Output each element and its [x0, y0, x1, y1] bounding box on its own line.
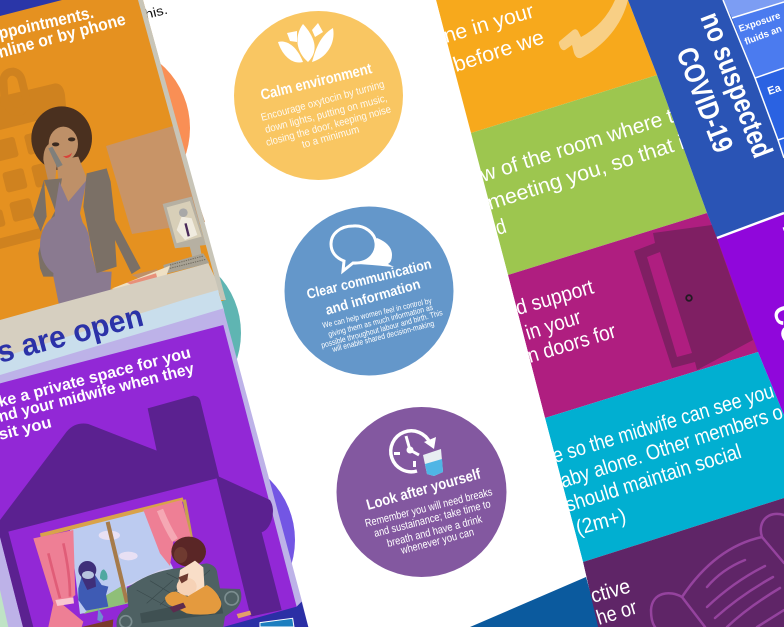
circle: look after yourself: Look after yourself [364, 465, 484, 514]
strip: green room: w of the room where t [477, 105, 676, 187]
table cells: Ea [766, 82, 784, 98]
circle: clear communication [284, 206, 454, 376]
panel: private space page [0, 308, 308, 627]
circle: look after yourself: breath and have a drink [386, 513, 484, 550]
strip: green room [471, 75, 707, 275]
strip: magenta doors: n doors for [525, 320, 619, 368]
icon: speech bubbles [331, 226, 394, 271]
circle: clear communication: We can help women feel in control by [321, 296, 433, 330]
illustration: pregnant woman on phone [31, 106, 161, 310]
icon: clock and glass [391, 431, 443, 476]
circle: look after yourself: whenever you can [399, 526, 475, 557]
panel: purple page [717, 213, 784, 415]
circle: look after yourself: and sustainance; take time to [373, 498, 492, 540]
icon: telephone handset [559, 0, 628, 58]
strip: plum mask: ctive [588, 575, 633, 608]
strip: green room: d [493, 215, 509, 240]
panel: visit page band [0, 290, 225, 385]
circle: look after yourself: Remember you will need breaks [364, 486, 494, 530]
circle: clear communication: possible throughout labour and birth. This [320, 308, 444, 350]
strip: orange phone: before we [450, 26, 547, 77]
page edge: navy footer [223, 602, 308, 627]
illustration: pregnant woman on sofa [116, 537, 251, 627]
text: private space: nd your midwife when they [0, 360, 196, 426]
illustration: calendar [0, 72, 67, 249]
rotated heading: no suspected COVID-19: COVID-19 [669, 43, 739, 157]
panel: appointments page [0, 0, 226, 370]
illustration: house silhouette [0, 396, 282, 627]
circle: calm environment: to a minimum [301, 123, 361, 151]
circle: clear communication: giving them as much information as [327, 303, 434, 339]
circle: calm environment [234, 11, 403, 180]
circle: clear communication: will enable shared decision-making [330, 319, 435, 354]
circle: calm environment: Encourage oxytocin by turning [260, 78, 386, 124]
circle: calm environment: down lights, putting on music, [264, 92, 389, 136]
panel: middle page circles [234, 11, 600, 627]
circle: calm environment: closing the door, keeping noise [265, 103, 392, 149]
strip: plum mask [583, 498, 784, 627]
strip: green room: meeting you, so that i [485, 131, 687, 215]
icon: face mask [651, 514, 784, 627]
strip: magenta doors: in your [523, 306, 584, 345]
table cells: Exposure [737, 10, 782, 35]
panel: COVID-19 blue page [628, 0, 784, 238]
page edge [138, 0, 226, 300]
illustration: computer monitor with doctor [163, 197, 209, 274]
circle: look after yourself [336, 407, 506, 577]
circle: calm environment: Calm environment [259, 60, 374, 104]
strip: cyan distance: should maintain social [563, 440, 744, 517]
strip: orange phone [436, 0, 657, 133]
illustration: window with midwife [40, 497, 193, 614]
strip: orange phone: ne in your [441, 0, 537, 48]
strip: cyan distance: (2m+) [573, 504, 629, 540]
text: private space [0, 345, 196, 444]
circle: clear communication: and information [323, 275, 422, 318]
text: private space: ke a private space for you [0, 345, 193, 411]
circle: clear communication: Clear communication [305, 255, 433, 302]
illustration: desk and papers [0, 263, 222, 362]
icon: lotus [278, 23, 334, 63]
heading: appointments: nline or by phone [0, 10, 128, 62]
illustration: notice board [106, 126, 205, 234]
table cells: fluids an [743, 23, 784, 48]
strip: cyan distance [545, 352, 784, 562]
footer band of middle page [470, 577, 600, 627]
text fragment on white page: his. [143, 2, 169, 22]
panel: coloured advice strips [436, 0, 784, 627]
partially hidden circles behind left page [20, 43, 295, 625]
illustration: midwife and curtain [33, 530, 113, 627]
icon: open door [634, 225, 753, 370]
table cells [723, 0, 784, 158]
strip: magenta doors: d support [513, 276, 596, 320]
rotated heading: no suspected COVID-19 [669, 8, 778, 162]
strip: magenta doors [508, 213, 765, 418]
